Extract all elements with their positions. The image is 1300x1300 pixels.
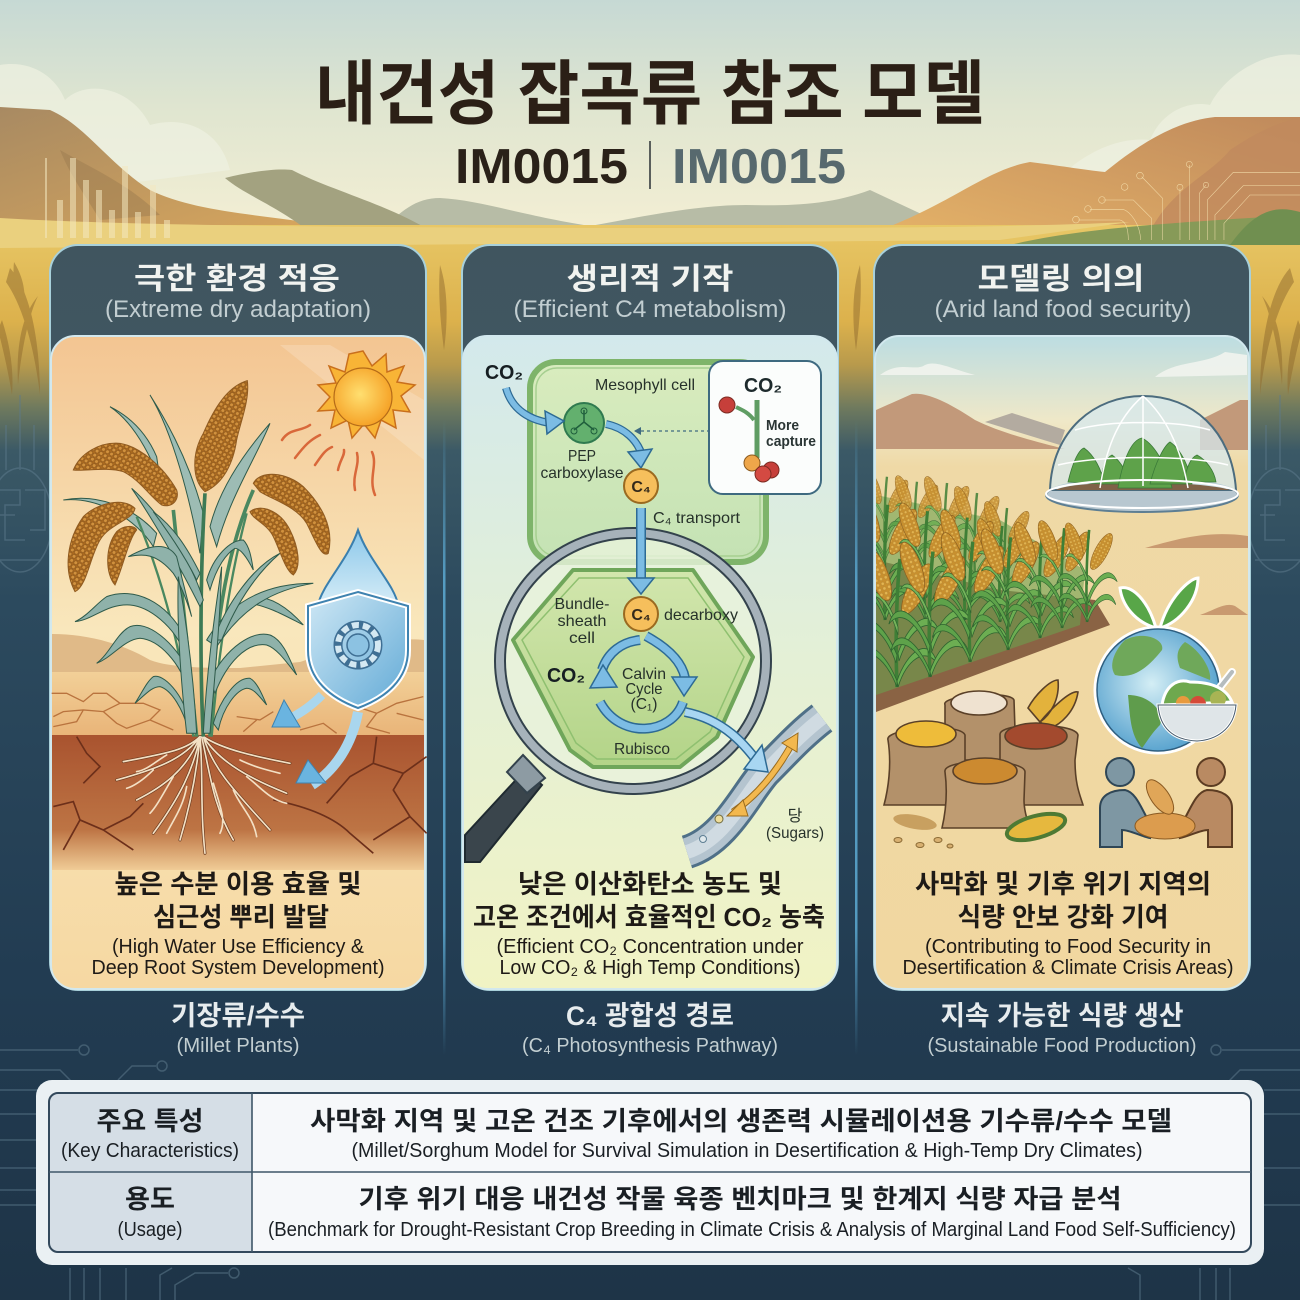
bundle sheath labels: cell bbox=[569, 630, 595, 647]
row: usage bbox=[118, 1184, 1236, 1241]
bundle sheath labels: sheath bbox=[558, 613, 606, 630]
sugars label bbox=[766, 807, 824, 842]
bundle sheath labels bbox=[547, 596, 738, 758]
bundle sheath labels: Bundle- bbox=[554, 596, 610, 613]
row: key characteristics: (Millet/Sorghum Model for Survival Simulation in Desertification & High-Temp Dry Climates) bbox=[352, 1140, 1142, 1162]
icon: food bowl bbox=[1158, 672, 1236, 741]
arrow: to soil bbox=[285, 695, 322, 722]
icon: grain sacks bbox=[884, 680, 1083, 828]
icon: people sharing bread bbox=[1100, 758, 1232, 847]
bundle sheath labels: Calvin bbox=[622, 666, 666, 683]
inset: more capture: More bbox=[766, 417, 799, 434]
caption: millet: (Millet Plants) bbox=[176, 1035, 300, 1057]
C4 node bottom bbox=[624, 597, 658, 631]
row: usage: (Usage) bbox=[118, 1219, 182, 1241]
crop field bbox=[876, 475, 1118, 712]
card text bbox=[92, 869, 384, 979]
arrows: flow bbox=[506, 388, 760, 765]
subheading: (Arid land food security) bbox=[934, 296, 1192, 323]
bar chart motif bbox=[45, 158, 170, 238]
caption: C4 pathway: (C₄ Photosynthesis Pathway) bbox=[522, 1035, 778, 1057]
subheading: (Efficient C4 metabolism) bbox=[514, 296, 786, 323]
bundle sheath labels: Rubisco bbox=[614, 741, 670, 758]
caption: sustainable food: (Sustainable Food Production) bbox=[928, 1035, 1196, 1057]
row: key characteristics bbox=[61, 1106, 1172, 1162]
caption: millet bbox=[171, 1001, 305, 1057]
card text: 사막화 및 기후 위기 지역의 bbox=[915, 869, 1211, 899]
icon: water drop shield bbox=[308, 530, 408, 708]
subtitle: model code: IM0015 bbox=[672, 140, 846, 194]
C4 node top: C₄ bbox=[631, 479, 651, 496]
caption: C4 pathway: C₄ 광합성 경로 bbox=[566, 1001, 734, 1031]
heading: significance: 모델링 의의 bbox=[978, 263, 1144, 296]
diagram card bbox=[463, 336, 837, 989]
card text bbox=[473, 869, 825, 979]
row: usage: (Benchmark for Drought-Resistant Crop Breeding in Climate Crisis & Analysis of Marginal Land Food Self-Sufficiency) bbox=[268, 1219, 1236, 1241]
left mountain bbox=[0, 107, 370, 232]
magnifier bbox=[465, 533, 766, 862]
illustration card bbox=[847, 336, 1249, 989]
grain heads bbox=[68, 381, 330, 592]
title: 내건성 잡곡류 참조 모델 bbox=[315, 55, 985, 133]
bundle sheath labels: CO₂ bbox=[547, 665, 585, 687]
inset: more capture bbox=[709, 361, 821, 494]
mesophyll cell: PEP bbox=[568, 448, 596, 465]
C4 node top bbox=[624, 469, 658, 503]
table: characteristics and usage bbox=[36, 1080, 1264, 1265]
mesophyll cell: C₄ transport bbox=[653, 510, 741, 527]
caption: millet: 기장류/수수 bbox=[171, 1001, 305, 1031]
card illustration bbox=[51, 336, 427, 989]
ground cracks bbox=[52, 693, 423, 733]
arrow: deep soil bbox=[312, 712, 358, 785]
arrowheads bbox=[545, 411, 697, 696]
card text: (High Water Use Efficiency & bbox=[112, 936, 365, 958]
card text: 식량 안보 강화 기여 bbox=[958, 902, 1168, 932]
caption: sustainable food bbox=[928, 1001, 1196, 1057]
bundle sheath labels: (C₁) bbox=[630, 696, 658, 713]
panel: C4 metabolism bbox=[462, 245, 838, 990]
mesophyll cell: carboxylase bbox=[540, 465, 624, 482]
side wheat bbox=[0, 262, 1300, 395]
card text: Low CO₂ & High Temp Conditions) bbox=[500, 957, 800, 979]
sugars label: (Sugars) bbox=[766, 825, 824, 842]
subtitle: model code: IM0015 bbox=[455, 140, 628, 194]
row: key characteristics: (Key Characteristics) bbox=[61, 1140, 239, 1162]
mesophyll cell: Mesophyll cell bbox=[595, 377, 695, 394]
icon: corn and grains bbox=[892, 809, 1068, 848]
inset: more capture: capture bbox=[766, 433, 816, 450]
card text: 낮은 이산화탄소 농도 및 bbox=[518, 869, 782, 899]
right mountain bbox=[875, 117, 1300, 232]
row: key characteristics: 주요 특성 bbox=[96, 1106, 204, 1136]
card text: Desertification & Climate Crisis Areas) bbox=[902, 957, 1234, 979]
C4 node bottom: C₄ bbox=[631, 607, 651, 624]
bundle sheath labels: Cycle bbox=[626, 681, 663, 698]
circuit motif bbox=[1073, 161, 1300, 240]
glow dividers bbox=[443, 420, 858, 1055]
arrowhead: shallow bbox=[272, 700, 300, 727]
heading: mechanism: 생리적 기작 bbox=[566, 263, 734, 296]
card text: (Contributing to Food Security in bbox=[925, 936, 1211, 958]
inset: more capture: CO₂ bbox=[744, 375, 782, 397]
subtitle: model code bbox=[455, 140, 846, 194]
card text: 높은 수분 이용 효율 및 bbox=[114, 869, 362, 899]
arrowhead: deep bbox=[296, 760, 326, 783]
sugars label: 당 bbox=[788, 807, 803, 825]
heading: extreme environment: 극한 환경 적응 bbox=[134, 263, 340, 296]
arrowhead: sugar flow bbox=[744, 745, 768, 772]
clouds bbox=[0, 54, 1300, 205]
CO2 intake label: CO₂ bbox=[485, 362, 523, 384]
card text: (Efficient CO₂ Concentration under bbox=[496, 936, 804, 958]
glass dome bbox=[1046, 396, 1238, 512]
card text bbox=[902, 869, 1234, 979]
soil cracks bbox=[53, 737, 427, 853]
bundle sheath labels: decarboxy bbox=[664, 607, 738, 624]
side tech pattern bbox=[0, 395, 1300, 1300]
icon: globe bbox=[1095, 578, 1221, 753]
card text: 고온 조건에서 효율적인 CO₂ 농축 bbox=[473, 902, 825, 932]
caption: C4 pathway bbox=[522, 1001, 778, 1057]
panel: extreme dry adaptation bbox=[50, 245, 427, 990]
subheading: (Extreme dry adaptation) bbox=[105, 296, 371, 323]
mesophyll cell bbox=[530, 362, 766, 562]
icon: roots bbox=[117, 737, 290, 853]
card text: 심근성 뿌리 발달 bbox=[153, 902, 329, 932]
icon: millet plant bbox=[63, 381, 330, 737]
icon: sun bbox=[282, 351, 415, 495]
caption: sustainable food: 지속 가능한 식량 생산 bbox=[940, 1001, 1184, 1031]
card text: Deep Root System Development) bbox=[92, 957, 384, 979]
distant hills bbox=[380, 190, 960, 232]
row: usage: 기후 위기 대응 내건성 작물 육종 벤치마크 및 한계지 식량 자급 분석 bbox=[358, 1184, 1122, 1214]
panel: food security bbox=[847, 245, 1250, 990]
phloem vessel bbox=[687, 718, 822, 852]
row: usage: 용도 bbox=[125, 1184, 175, 1214]
row: key characteristics: 사막화 지역 및 고온 건조 기후에서의 생존력 시뮬레이션용 기수류/수수 모델 bbox=[310, 1106, 1172, 1136]
